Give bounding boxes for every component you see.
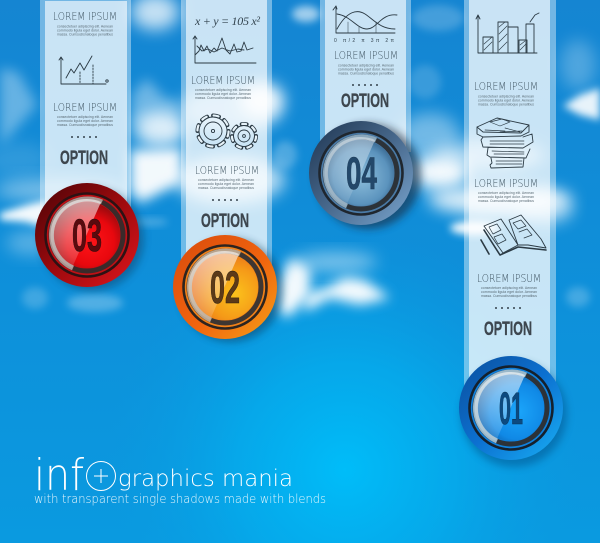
badge: 02 orange: 02 — [210, 262, 240, 313]
text block 01 b: consectetuer adipiscing elit. Aenean — [478, 191, 534, 195]
icon: stack of books sketch — [477, 118, 533, 168]
text block 03 b: consectetuer adipiscing elit. Aenean — [57, 115, 113, 119]
heading: lorem ipsum 01 b: LOREM IPSUM — [474, 177, 538, 190]
badge: 04 steel blue: 04 — [346, 148, 377, 199]
panel: option 02 — [181, 0, 272, 266]
dots 02 — [212, 199, 238, 201]
icon: wave chart sketch — [193, 36, 256, 63]
panel: option 01 — [464, 0, 556, 388]
icon: curves chart sketch: 0 π/2 π 3π 2π — [334, 38, 395, 44]
text block 01 b: massa. Cumsociisnatoque penatibus — [478, 199, 534, 203]
text block 02 a: commodo ligula eget dolor. Aenean — [195, 92, 251, 96]
icon: gears sketch — [198, 116, 256, 148]
heading: lorem ipsum 02 a: LOREM IPSUM — [191, 74, 255, 87]
icon: bar chart sketch — [476, 13, 539, 53]
icon: equation sketch: x + y = 105 x² — [194, 14, 260, 28]
text block 01 a: massa. Cumsociisnatoque penatibus — [478, 102, 534, 106]
text block 01 c — [481, 286, 537, 298]
panel: option 03 — [40, 0, 131, 214]
dots 03 — [71, 136, 97, 138]
text block 04: massa. Cumsociisnatoque penatibus — [338, 72, 394, 76]
badge: 03 red: 03 — [72, 210, 102, 261]
text block 02 b: commodo ligula eget dolor. Aenean — [198, 182, 254, 186]
text block 02 a: consectetuer adipiscing elit. Aenean — [195, 88, 251, 92]
heading: lorem ipsum 03 b: LOREM IPSUM — [53, 101, 117, 114]
title word: inf: inf — [34, 450, 84, 501]
label: option 01: OPTION — [484, 319, 532, 340]
icon: curves chart sketch — [333, 6, 397, 44]
heading: lorem ipsum 03 a: LOREM IPSUM — [53, 10, 117, 23]
panel: option 04 — [320, 0, 411, 152]
dots 01 — [495, 307, 521, 309]
badge: 04 steel blue — [309, 121, 421, 229]
text block 04: commodo ligula eget dolor. Aenean — [338, 68, 394, 72]
heading: lorem ipsum 02 b: LOREM IPSUM — [195, 164, 259, 177]
badge: 03 red — [35, 183, 144, 291]
heading: lorem ipsum 04: LOREM IPSUM — [334, 49, 398, 62]
label: option 04: OPTION — [341, 91, 389, 112]
text block 01 c: massa. Cumsociisnatoque penatibus — [481, 294, 537, 298]
icon: plus in circle — [86, 462, 116, 490]
label: option 02: OPTION — [201, 211, 249, 232]
text block 04 — [338, 64, 394, 76]
text block 01 b — [478, 191, 534, 203]
text block 02 b: consectetuer adipiscing elit. Aenean — [198, 178, 254, 182]
icon: line chart sketch — [59, 56, 108, 84]
icon: open book sketch — [481, 215, 546, 255]
text block 03 b: massa. Cumsociisnatoque penatibus — [57, 123, 113, 127]
text block 01 b: commodo ligula eget dolor. Aenean — [478, 195, 534, 199]
text block 02 a: massa. Cumsociisnatoque penatibus — [195, 96, 251, 100]
heading: lorem ipsum 01 a: LOREM IPSUM — [474, 80, 538, 93]
subtitle: with transparent single shadows made with blends — [34, 491, 326, 506]
text block 03 a: consectetuer adipiscing elit. Aenean — [57, 24, 113, 28]
badge: 01 blue — [459, 356, 567, 467]
text block 01 a — [478, 94, 534, 106]
text block 01 c: consectetuer adipiscing elit. Aenean — [481, 286, 537, 290]
dots 04 — [352, 84, 378, 86]
text block 04: consectetuer adipiscing elit. Aenean — [338, 64, 394, 68]
text block 03 b — [57, 115, 113, 127]
text block 03 a: commodo ligula eget dolor. Aenean — [57, 28, 113, 32]
text block 02 a — [195, 88, 251, 100]
title words: graphics mania: graphics mania — [118, 466, 293, 492]
clouds — [0, 0, 600, 318]
label: option 03: OPTION — [60, 148, 108, 169]
text block 01 a: consectetuer adipiscing elit. Aenean — [478, 94, 534, 98]
badge: 02 orange — [173, 235, 283, 342]
text block 01 c: commodo ligula eget dolor. Aenean — [481, 290, 537, 294]
badge: 01 blue: 01 — [499, 383, 523, 434]
text block 03 a: massa. Cumsociisnatoque penatibus — [57, 32, 113, 36]
text block 01 a: commodo ligula eget dolor. Aenean — [478, 98, 534, 102]
text block 03 b: commodo ligula eget dolor. Aenean — [57, 119, 113, 123]
text block 03 a — [57, 24, 113, 36]
title — [34, 450, 326, 506]
heading: lorem ipsum 01 c: LOREM IPSUM — [477, 272, 541, 285]
text block 02 b: massa. Cumsociisnatoque penatibus — [198, 186, 254, 190]
text block 02 b — [198, 178, 254, 190]
